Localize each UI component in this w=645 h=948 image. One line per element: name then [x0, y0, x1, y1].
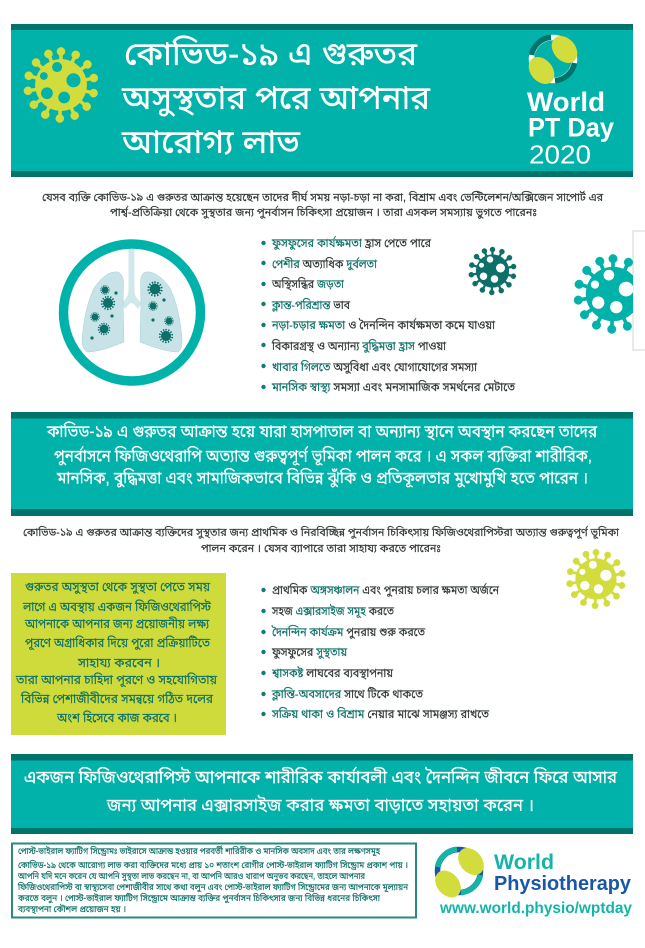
help list: ক্লান্তি-অবসাদের সাথে টিকে থাকতে [271, 686, 423, 701]
panel: lime box [11, 573, 226, 735]
intro text: যেসব ব্যক্তি কোভিড-১৯ এ গুরুতর আক্রান্ত হয়েছেন তাদের দীর্ঘ সময় নড়া-চড়া না করা, বিশ্রাম এবং ভেন্টিলেশন/অক্সিজেন সাপোর্ট এর [42, 190, 603, 204]
symptoms list [261, 235, 515, 394]
note text: ফিজিওথেরাপিস্ট বা স্বাস্থ্যসেবা পেশাজীবীর সাথে কথা বলুন এবং পোস্ট-ভাইরাল ফ্যাটিগ সিন্ড্রোমের জন্য আপনাকে মূল্যায়ন [17, 881, 409, 893]
icon: lime virus [566, 549, 626, 609]
band text [46, 422, 597, 488]
lime box text [15, 579, 218, 725]
lung virus particles [90, 281, 174, 343]
title: কোভিড-১৯ এ গুরুতর [124, 34, 417, 72]
World PT Day logo: PT Day [528, 112, 614, 142]
World Physiotherapy logo: Physiotherapy [494, 872, 632, 895]
band text [24, 766, 618, 815]
symptoms list: অস্থিসন্ধির জড়তা [271, 276, 345, 291]
note text [17, 845, 409, 914]
help list: ফুসফুসের সুস্থতায় [271, 645, 347, 660]
symptoms list: ফুসফুসের কার্যক্ষমতা হ্রাস পেতে পারে [271, 235, 432, 251]
second intro text: পালন করেন । যেসব ব্যাপারে তারা সাহায্য করতে পারেনঃ [201, 543, 441, 555]
callout band: exercise [11, 754, 633, 834]
second intro text [23, 525, 620, 555]
symptoms list: ক্লান্ত-পরিশ্রান্ত ভাব [271, 297, 351, 312]
band text: পুনর্বাসনে ফিজিওথেরাপি অত্যান্ত গুরুত্বপূর্ণ ভূমিকা পালন করে । এ সকল ব্যক্তিরা শারীরিক, [54, 446, 592, 466]
help list: সক্রিয় থাকা ও বিশ্রাম নেয়ার মাঝে সামঞ্জস্য রাখতে [271, 706, 489, 721]
help list: দৈনন্দিন কার্যক্রম পুনরায় শুরু করতে [271, 624, 425, 640]
band text: একজন ফিজিওথেরাপিস্ট আপনাকে শারীরিক কার্যাবলী এবং দৈনন্দিন জীবনে ফিরে আসার [24, 766, 618, 787]
lime box text: গুরুতর অসুস্থতা থেকে সুস্থতা পেতে সময় [25, 579, 211, 595]
World PT Day logo: World [527, 87, 605, 117]
panel: post-viral fatigue note [12, 844, 416, 918]
icon: teal virus [574, 254, 633, 334]
symptoms list: পেশীর অত্যাধিক দুর্বলতা [272, 256, 378, 271]
title: আরোগ্য লাভ [121, 123, 301, 160]
help list: শ্বাসকষ্ট লাঘবের ব্যবস্থাপনায় [271, 665, 393, 680]
World PT Day logo: 2020 [529, 140, 591, 170]
lime box text: পূরণে অগ্রাধিকার দিয়ে পুরো প্রক্রিয়াটিতে [25, 635, 211, 651]
note text: আপনি যদি মনে করেন যে আপনি সুস্থতা লাভ করছেন না, বা আপনি আরও খারাপ অনুভব করছেন, তাহলে আপনার [17, 870, 366, 882]
note text: করতে বলুন । পোস্ট-ভাইরাল ফ্যাটিগ সিন্ড্রোমে আক্রান্ত ব্যক্তির পুনর্বাসন চিকিৎসার জন্য বিভিন্ন ধরনের চিকিৎসা [17, 892, 381, 904]
World Physiotherapy logo: www.world.physio/wptday [439, 900, 632, 917]
help list: সহজ এক্সারসাইজ সমূহ করতে [271, 603, 394, 619]
lime box text: অংশ হিসেবে কাজ করবে । [56, 710, 177, 725]
symptoms list: নড়া-চড়ার ক্ষমতা ও দৈনন্দিন কার্যক্ষমতা কমে যাওয়া [271, 317, 496, 332]
World PT Day logo [523, 31, 614, 169]
intro text: পার্শ্ব-প্রতিক্রিয়া থেকে সুস্থতার জন্য পুনর্বাসন চিকিৎসা প্রয়োজন । তারা এসকল সমস্যায় ভুগতে পারেনঃ [110, 205, 537, 219]
title [121, 34, 430, 160]
symptoms list: খাবার গিলতে অসুবিধা এবং যোগাযোগের সমস্যা [272, 359, 478, 375]
title: অসুস্থতার পরে আপনার [121, 79, 430, 117]
icon: lungs in circle [64, 244, 200, 381]
note text: কোভিড-১৯ থেকে আরোগ্য লাভ করা ব্যক্তিদের মধ্যে প্রায় ১০ শতাংশ রোগীর পোস্ট-ভাইরাল ফ্যাটিগ সিন্ড্রোম প্রকাশ পায় । [18, 859, 408, 871]
lime box text: সাহায্য করবেন । [77, 655, 160, 670]
icon: yellow virus [23, 47, 99, 123]
help list: প্রাথমিক অঙ্গসঞ্চালন এবং পুনরায় চলার ক্ষমতা অর্জনে [272, 582, 500, 598]
band text: কাভিড-১৯ এ গুরুতর আক্রান্ত হয়ে যারা হাসপাতাল বা অন্যান্য স্থানে অবস্থান করছেন তাদের [46, 422, 597, 441]
lime box text: লাগে এ অবস্থায় একজন ফিজিওথেরাপিস্ট [22, 599, 211, 614]
lime box text: তারা আপনার চাহিদা পূরণে ও সহযোগিতায় [15, 672, 218, 688]
note text: পোস্ট-ভাইরাল ফ্যাটিগ সিন্ড্রোমঃ ভাইরাসে আক্রান্ত হওয়ার পরবর্তী শারিরীক ও মানসিক অবসাদ এবং তার লক্ষণসমূহ [18, 845, 380, 857]
intro text [42, 190, 603, 219]
help list [261, 582, 500, 721]
icon: dark teal virus [468, 247, 517, 295]
lime box text: আপনাকে আপনার জন্য প্রয়োজনীয় লক্ষ্য [24, 616, 209, 631]
note text: ব্যবস্থাপনা কৌশল প্রয়োজন হয় । [17, 903, 126, 914]
World Physiotherapy logo: World [494, 851, 554, 874]
header panel [11, 24, 633, 177]
callout band: role of physiotherapy [11, 412, 633, 516]
band text: জন্য আপনার এক্সারসাইজ করার ক্ষমতা বাড়াতে সহায়তা করেন । [106, 795, 534, 815]
lime box text: বিভিন্ন পেশাজীবীদের সমন্বয়ে গঠিত দলের [20, 691, 213, 706]
band text: মানসিক, বুদ্ধিমত্তা এবং সামাজিকভাবে বিভিন্ন ঝুঁকি ও প্রতিকূলতার মুখোমুখি হতে পারেন । [56, 468, 588, 488]
symptoms list: মানসিক স্বাস্থ্য সমস্যা এবং মনসামাজিক সমর্থনের মেটাতে [271, 379, 515, 394]
second intro text: কোভিড-১৯ এ গুরুতর আক্রান্ত ব্যক্তিদের সুস্থতার জন্য প্রাথমিক ও নিরবিচ্ছিন্ন পুনর্বাসন চিকিৎসায় ফিজিওথেরাপিস্টরা অত্যান্ত গুরুত্বপূর্ণ ভূমিকা [23, 525, 620, 539]
symptoms list: বিকারগ্রস্থ ও অন্যান্য বুদ্ধিমত্তা হ্রাস পাওয়া [271, 338, 447, 354]
side tab [633, 231, 645, 350]
World Physiotherapy logo [430, 843, 632, 917]
